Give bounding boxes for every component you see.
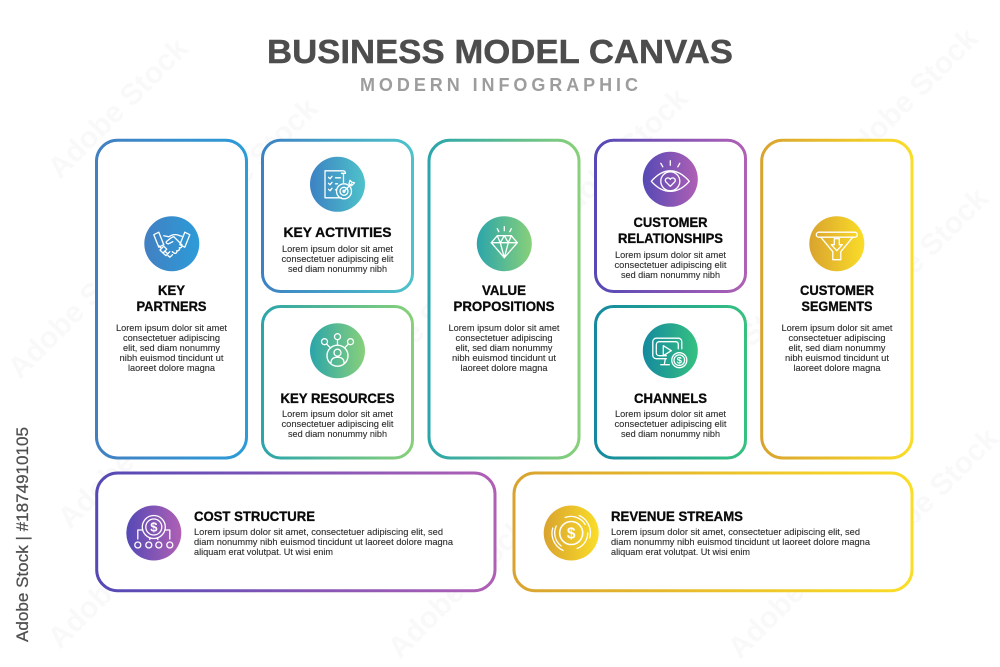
body text: laoreet dolore magna [128,363,216,373]
panel: value propositions [429,140,579,458]
heading [618,215,723,246]
heading: CUSTOMER [800,283,874,298]
heading: KEY [158,283,185,298]
panel border [596,140,746,292]
icon: monitor with play and coin [643,323,698,378]
body text: Lorem ipsum dolor sit amet [615,250,726,260]
panel: key partners [96,140,246,458]
stock credit: Adobe Stock | #1874910105 [14,427,32,642]
panel: revenue streams [514,473,912,591]
body text: sed diam nonummy nibh [621,270,720,280]
icon: dollar coin with arcs [544,506,599,560]
body text: Lorem ipsum dolor sit amet [448,323,560,333]
body text: Lorem ipsum dolor sit amet [782,323,893,333]
stock watermark: Adobe Stock [42,502,195,655]
body text: nibh euismod tincidunt ut [785,353,889,363]
body text [611,527,871,557]
icon: diamond [477,216,532,271]
panel border [762,140,912,458]
body text: Lorem ipsum dolor sit amet, consectetuer adipiscing elit, sed [611,527,860,537]
panel: channels [596,306,746,458]
body text [614,250,727,280]
body text: sed diam nonummy nibh [288,264,387,274]
body text: consectetuer adipiscing elit [614,260,727,270]
stock watermark: Adobe Stock [172,92,325,245]
body text: sed diam nonummy nibh [288,429,387,439]
body text [282,244,394,274]
body text: laoreet dolore magna [794,363,881,373]
body text: elit, sed diam nonummy [123,343,220,353]
subtitle: MODERN INFOGRAPHIC [360,75,638,95]
icon: dollar coin with arcs: $ [567,526,576,542]
panel border [96,140,246,458]
body text: aliquam erat volutpat. Ut wisi enim [611,547,750,557]
body text: laoreet dolore magna [460,363,548,373]
icon: coin network [126,506,181,560]
body text: consectetuer adipiscing elit [614,419,727,429]
body text: consectetuer adipiscing [123,333,220,343]
icon: eye with heart [643,152,698,207]
panel border [514,473,912,591]
icon: funnel [809,216,864,271]
heading [136,283,206,314]
stock watermark: Adobe Stock [342,252,495,405]
stock watermark: Adobe Stock [722,512,875,665]
panel: key activities [262,140,412,292]
heading: COST STRUCTURE [194,509,315,524]
body text [448,323,560,373]
heading: SEGMENTS [802,299,872,314]
body text [614,409,727,439]
body text: aliquam erat volutpat. Ut wisi enim [194,547,333,557]
heading: PARTNERS [136,299,206,314]
panel: cost structure [97,473,495,591]
body text: diam nonummy nibh euismod tincidunt ut laoreet dolore magna [194,537,454,547]
heading: KEY RESOURCES [280,391,394,406]
panel: customer segments [762,140,912,458]
stock watermark: Adobe Stock [2,232,155,385]
panel border [429,140,579,458]
body text [782,323,893,373]
heading: REVENUE STREAMS [611,509,743,524]
stock watermark: Adobe Stock [382,512,535,665]
icon: monitor with play and coin: $ [677,356,683,367]
heading: CHANNELS [634,391,707,406]
body text: Lorem ipsum dolor sit amet [615,409,726,419]
body text: consectetuer adipiscing [456,333,552,343]
heading [800,283,874,314]
body text: consectetuer adipiscing elit [282,419,394,429]
body text [116,323,227,373]
body text: nibh euismod tincidunt ut [120,353,224,363]
icon: handshake [144,216,199,271]
stock watermark: Adobe Stock [662,272,815,425]
panel border [596,306,746,458]
stock watermark: Adobe Stock [42,32,195,185]
body text [194,527,454,557]
heading: CUSTOMER [634,215,708,230]
body text: elit, sed diam nonummy [456,343,553,353]
heading: VALUE [482,283,526,298]
body text: Lorem ipsum dolor sit amet [116,323,227,333]
panel border [97,473,495,591]
panel border [262,140,412,292]
body text: Lorem ipsum dolor sit amet [282,244,393,254]
panel border [262,306,412,458]
heading: PROPOSITIONS [454,299,554,314]
heading: KEY ACTIVITIES [284,225,392,240]
panel: customer relationships [596,140,746,292]
body text: consectetuer adipiscing elit [282,254,394,264]
stock watermark: Adobe Stock [842,182,995,335]
body text: diam nonummy nibh euismod tincidunt ut laoreet dolore magna [611,537,871,547]
body text: nibh euismod tincidunt ut [452,353,556,363]
title: BUSINESS MODEL CANVAS [267,33,733,70]
heading: RELATIONSHIPS [618,231,723,246]
body text: sed diam nonummy nibh [621,429,720,439]
body text: Lorem ipsum dolor sit amet, consectetuer adipiscing elit, sed [194,527,443,537]
body text: Lorem ipsum dolor sit amet [282,409,393,419]
icon: checklist and target [310,157,365,212]
icon: person network [310,323,365,378]
stock watermark: Adobe Stock [832,22,985,175]
heading [454,283,554,314]
icon: coin network: $ [150,520,158,534]
body text [282,409,394,439]
body text: consectetuer adipiscing [788,333,886,343]
stock watermark: Adobe Stock [542,82,695,235]
panel: key resources [262,306,412,458]
stock watermark: Adobe Stock [52,382,205,535]
body text: elit, sed diam nonummy [788,343,886,353]
